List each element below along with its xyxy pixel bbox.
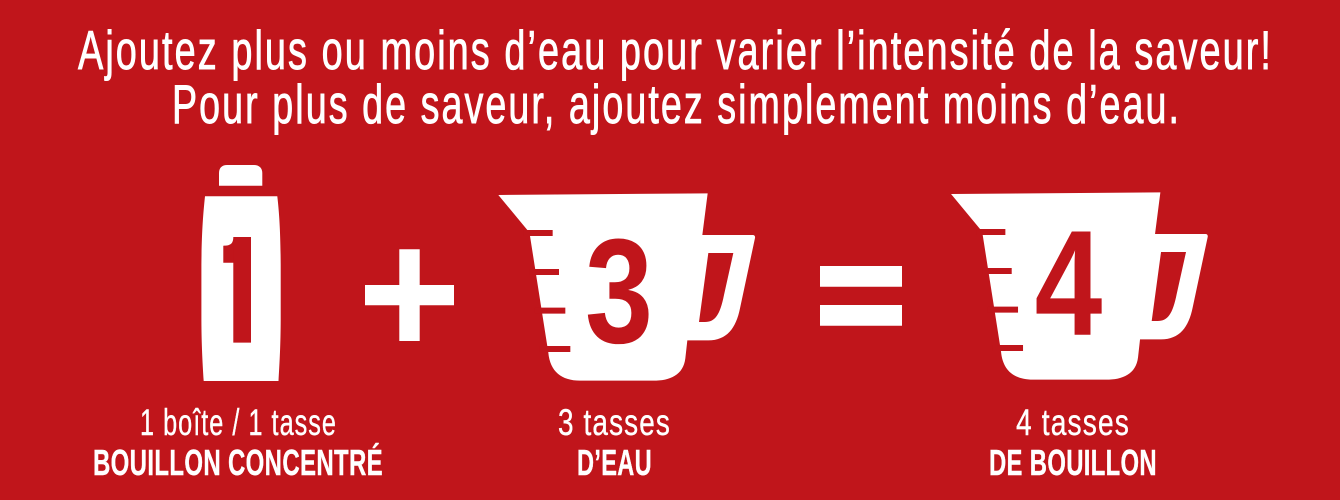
label: water: D’EAU bbox=[577, 442, 652, 483]
icon: measuring cup with number 4 bbox=[951, 192, 1208, 380]
label: water bbox=[558, 402, 671, 483]
icon: measuring cup with number 3 bbox=[498, 193, 755, 381]
label: broth: 4 tasses bbox=[1016, 402, 1130, 443]
icon: measuring cup with number 4: 4 bbox=[1035, 198, 1102, 367]
label: concentrate: 1 boîte / 1 tasse bbox=[140, 402, 337, 443]
equals sign bbox=[820, 266, 902, 326]
label: concentrate: BOUILLON CONCENTRÉ bbox=[93, 442, 383, 483]
label: broth: DE BOUILLON bbox=[989, 442, 1157, 483]
label: concentrate bbox=[93, 402, 383, 483]
title bbox=[78, 19, 1273, 135]
label: water: 3 tasses bbox=[558, 402, 671, 443]
icon: concentrate carton with number 1: 1 bbox=[196, 207, 280, 375]
plus sign bbox=[365, 249, 454, 341]
label: broth bbox=[989, 402, 1157, 483]
icon: measuring cup with number 3: 3 bbox=[585, 208, 653, 374]
